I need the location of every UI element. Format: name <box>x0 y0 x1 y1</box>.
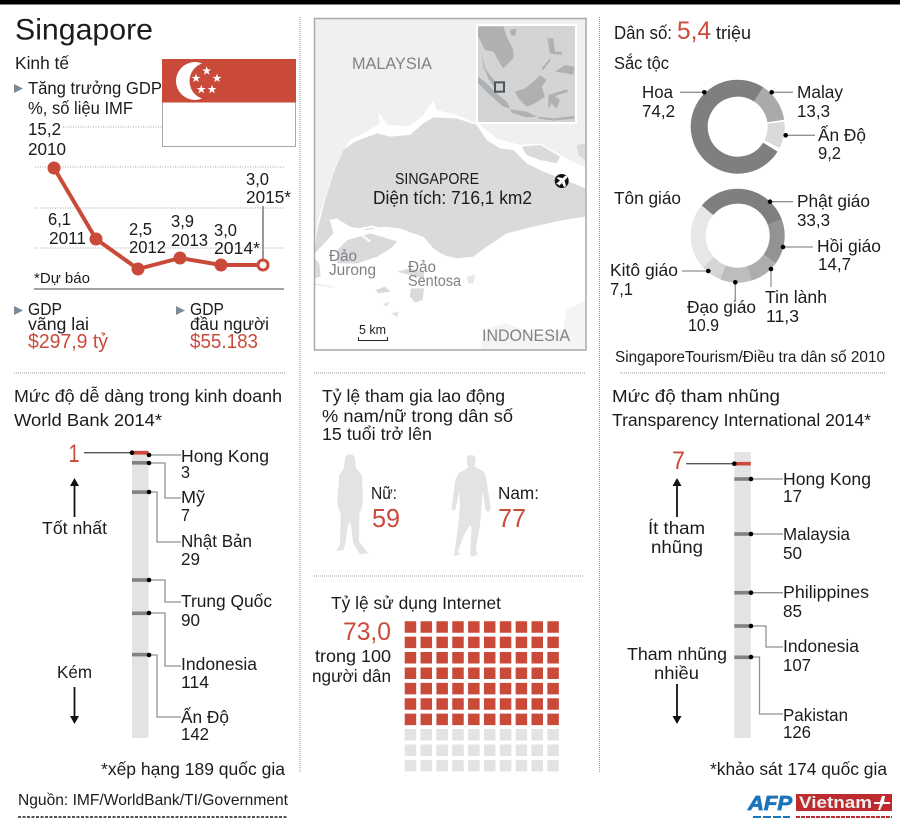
Singapore rank <box>672 447 737 475</box>
callout: Pakistan: Pakistan <box>783 705 848 725</box>
map labels: Jurong <box>329 262 376 279</box>
map labels: SINGAPORE <box>395 171 479 188</box>
callout: Indonesia: Indonesia <box>783 636 859 656</box>
logo: AFP Vietnam+ <box>747 793 892 817</box>
data labels: 2011 <box>49 228 86 248</box>
callout: Japan <box>147 490 252 569</box>
callout: Indonesia <box>147 611 257 692</box>
callout: Malay <box>769 82 843 121</box>
scale bar: 5 km <box>359 323 386 337</box>
heading: corruption: Transparency International 2014* <box>612 410 871 430</box>
forecast note: *Dự báo <box>34 270 90 287</box>
donut chart: ethnicity <box>684 73 791 180</box>
chart heading: Tăng trưởng GDP <box>28 78 162 98</box>
arrow: more corruption: Tham nhũng <box>627 644 727 664</box>
callout: Pakistan <box>749 655 848 742</box>
callout: Hoa: Hoa <box>642 82 673 102</box>
stat: men: Nam: <box>498 483 539 503</box>
data labels: 2,5 <box>129 219 152 239</box>
callout: Taoism: Đạo giáo <box>687 297 756 317</box>
arrow: more corruption: nhiều <box>654 663 699 683</box>
map labels: MALAYSIA <box>352 54 433 73</box>
arrow: less corruption: nhũng <box>651 537 703 557</box>
heading: corruption: Mức độ tham nhũng <box>612 386 780 406</box>
callout: Hong Kong: Hong Kong <box>181 446 269 466</box>
heading: labour participation <box>322 386 513 444</box>
icon: flag of Singapore <box>162 59 296 146</box>
chart heading <box>28 78 162 118</box>
callout: Protestant: 11,3 <box>766 306 799 326</box>
callout: Philippines: Philippines <box>783 582 869 602</box>
stat: men: 77 <box>498 503 526 533</box>
callout: Hoa <box>642 82 707 121</box>
callout: Buddhism: 33,3 <box>797 210 830 230</box>
arrow: best <box>42 478 107 538</box>
callout: Malay: Malay <box>797 82 843 102</box>
callout: Christianity: Kitô giáo <box>610 260 678 280</box>
stat: men <box>498 483 539 533</box>
heading: population <box>614 17 751 45</box>
panel: religion donut <box>610 180 881 335</box>
callout: Christianity <box>610 260 711 299</box>
callout: India <box>783 124 866 163</box>
heading: population: Dân số: <box>614 23 672 43</box>
heading: economy: Kinh tế <box>15 53 69 73</box>
stat: GDP per capita: $55.183 <box>190 330 258 353</box>
data labels: 15,2 <box>28 119 61 139</box>
arrow: more corruption <box>627 644 727 724</box>
panel: ease of doing business scale <box>42 440 285 779</box>
panel: GDP growth chart <box>14 78 291 289</box>
Singapore rank: 7 <box>672 447 685 475</box>
data labels: 3,9 <box>171 211 194 231</box>
Singapore rank: 1 <box>68 440 80 468</box>
map labels: Đảo <box>329 248 357 265</box>
callout: USA: 7 <box>181 505 190 525</box>
callout: China: Trung Quốc <box>181 591 272 611</box>
callout: Hong Kong <box>147 446 269 482</box>
callout: Indonesia: 107 <box>783 655 811 675</box>
heading: labour participation: Tỷ lệ tham gia lao động <box>322 386 505 406</box>
panel: corruption scale <box>627 447 887 779</box>
callout: Pakistan: 126 <box>783 722 811 742</box>
heading: ease of doing business <box>14 385 282 430</box>
callout: Indonesia: 114 <box>181 672 209 692</box>
callout: Islam <box>781 236 881 274</box>
data labels: 6,1 <box>48 209 71 229</box>
stat: internet rate: 73,0 <box>343 618 391 646</box>
map labels: Đảo <box>408 259 436 276</box>
callout: Protestant: Tin lành <box>765 287 827 307</box>
callout: Malaysia: 50 <box>783 543 802 563</box>
footnote: *xếp hạng 189 quốc gia <box>101 759 285 779</box>
stat: current account GDP: vãng lai <box>28 314 89 334</box>
callout: Hong Kong: 17 <box>783 486 802 506</box>
logo: AFP Vietnam+: Vietnam <box>799 793 872 812</box>
callout: Hoa: 74,2 <box>642 101 675 121</box>
stat: current account GDP: $297,9 tỷ <box>28 330 109 353</box>
heading: labour participation: % nam/nữ trong dân số <box>322 406 513 426</box>
map labels <box>329 54 571 345</box>
stat: women <box>371 483 400 533</box>
logo: AFP Vietnam+: AFP <box>747 793 793 815</box>
stat: current account GDP: GDP <box>28 299 62 319</box>
waffle chart <box>405 627 560 766</box>
footnote: *khảo sát 174 quốc gia <box>710 759 887 779</box>
callout: Hong Kong <box>749 469 871 506</box>
data labels <box>28 119 291 258</box>
callout: Hong Kong: Hong Kong <box>783 469 871 489</box>
source line: Nguồn: IMF/WorldBank/TI/Government <box>18 792 289 809</box>
callout: Buddhism: Phật giáo <box>797 191 870 211</box>
stat: current account GDP <box>14 299 109 353</box>
callout: Malaysia <box>749 524 850 563</box>
callout: Christianity: 7,1 <box>610 279 633 299</box>
stat: GDP per capita: GDP <box>190 299 224 319</box>
panel: ethnicity donut: Sắc tộc <box>614 52 669 73</box>
panel: labour participation figures <box>336 454 539 557</box>
Singapore rank <box>68 440 134 468</box>
data labels: 2014* <box>214 238 260 258</box>
heading: corruption <box>612 386 871 430</box>
stat: GDP per capita: đầu người <box>190 314 269 334</box>
data labels: 2012 <box>129 237 166 257</box>
callout: India: Ấn Độ <box>181 706 229 727</box>
map labels: Sentosa <box>408 273 461 290</box>
stat: GDP per capita <box>176 299 269 353</box>
callout: Taoism <box>687 280 756 335</box>
scale bar <box>734 452 751 738</box>
data labels: 2013 <box>171 230 208 250</box>
arrow: best: Tốt nhất <box>42 518 107 538</box>
icon: airport <box>555 174 569 188</box>
stat: internet rate: người dân <box>312 666 391 686</box>
map labels: INDONESIA <box>482 326 571 345</box>
heading: ease of doing business: Mức độ dễ dàng trong kinh doanh <box>14 385 282 406</box>
callout: Islam: Hồi giáo <box>817 236 881 256</box>
callout: Islam: 14,7 <box>818 254 851 274</box>
arrow: worst: Kém <box>57 662 92 682</box>
data labels: 3,0 <box>246 169 269 189</box>
callout: India: 142 <box>181 724 209 744</box>
callout: Japan: 29 <box>181 549 200 569</box>
icon: woman silhouette <box>336 454 368 554</box>
callout: India: Ấn Độ <box>818 124 866 145</box>
callout: India <box>147 653 229 744</box>
callout: Hong Kong: 3 <box>181 462 190 482</box>
donut chart: religion <box>682 180 793 291</box>
panel: internet usage: Tỷ lệ sử dụng Internet <box>331 593 501 613</box>
stat: internet rate <box>312 618 391 686</box>
icon: triangle bullet <box>14 84 23 93</box>
callout: Taoism: 10.9 <box>688 315 719 335</box>
callout: USA <box>147 461 205 525</box>
callout: Japan: Nhật Bản <box>181 531 252 551</box>
map inset <box>477 25 576 123</box>
callout: Protestant <box>765 267 827 326</box>
callout: Indonesia <box>749 624 859 675</box>
stat: women: Nữ: <box>371 483 397 503</box>
source: population data: SingaporeTourism/Điều tra dân số 2010 <box>615 349 885 366</box>
chart heading: %, số liệu IMF <box>28 98 133 118</box>
heading: population: triệu <box>716 23 751 43</box>
title: Singapore <box>15 14 153 46</box>
data labels: 2010 <box>28 139 66 159</box>
callout: China <box>147 578 272 630</box>
arrow: less corruption <box>648 478 705 557</box>
icon: man silhouette <box>452 455 491 557</box>
panel: ethnicity donut <box>614 52 866 180</box>
callout: USA: Mỹ <box>181 487 205 507</box>
map labels: Diện tích: 716,1 km2 <box>373 187 532 208</box>
heading: ease of doing business: World Bank 2014* <box>14 410 162 430</box>
callout: Philippines: 85 <box>783 601 802 621</box>
callout: Malay: 13,3 <box>797 101 830 121</box>
callout: China: 90 <box>181 610 200 630</box>
arrow: less corruption: Ít tham <box>648 518 705 538</box>
stat: internet rate: trong 100 <box>315 646 391 666</box>
callout: Buddhism <box>768 191 870 230</box>
line series <box>48 162 268 276</box>
arrow: worst <box>57 662 92 724</box>
heading: population: 5,4 <box>677 17 711 45</box>
heading: labour participation: 15 tuổi trở lên <box>322 424 432 444</box>
scale bar <box>132 450 148 738</box>
stat: women: 59 <box>372 503 400 533</box>
data labels: 2015* <box>246 187 291 207</box>
panel: internet usage <box>312 593 560 766</box>
data labels: 3,0 <box>214 220 237 240</box>
callout: Malaysia: Malaysia <box>783 524 850 544</box>
panel: map of Singapore <box>314 18 586 350</box>
panel: religion donut: Tôn giáo <box>614 188 681 208</box>
callout: Indonesia: Indonesia <box>181 654 257 674</box>
callout: Philippines <box>749 582 869 621</box>
callout: India: 9,2 <box>818 143 841 163</box>
